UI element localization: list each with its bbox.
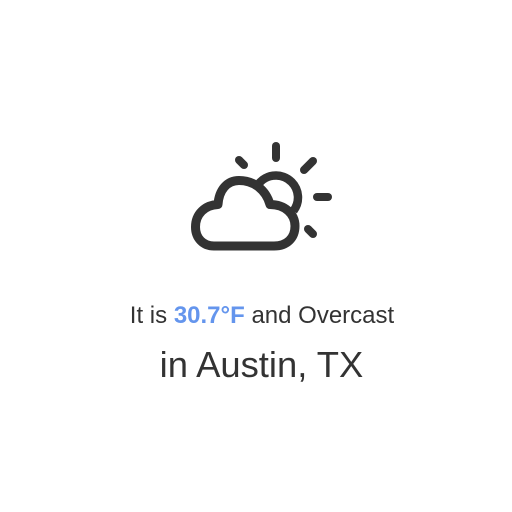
text: temperature and condition: It is 30.7°F and Overcast — [130, 302, 394, 329]
text: location: in Austin, TX — [160, 344, 363, 385]
icon: sun rays — [239, 146, 328, 234]
icon: cloud — [196, 180, 295, 246]
icon: sun disc — [257, 175, 298, 211]
